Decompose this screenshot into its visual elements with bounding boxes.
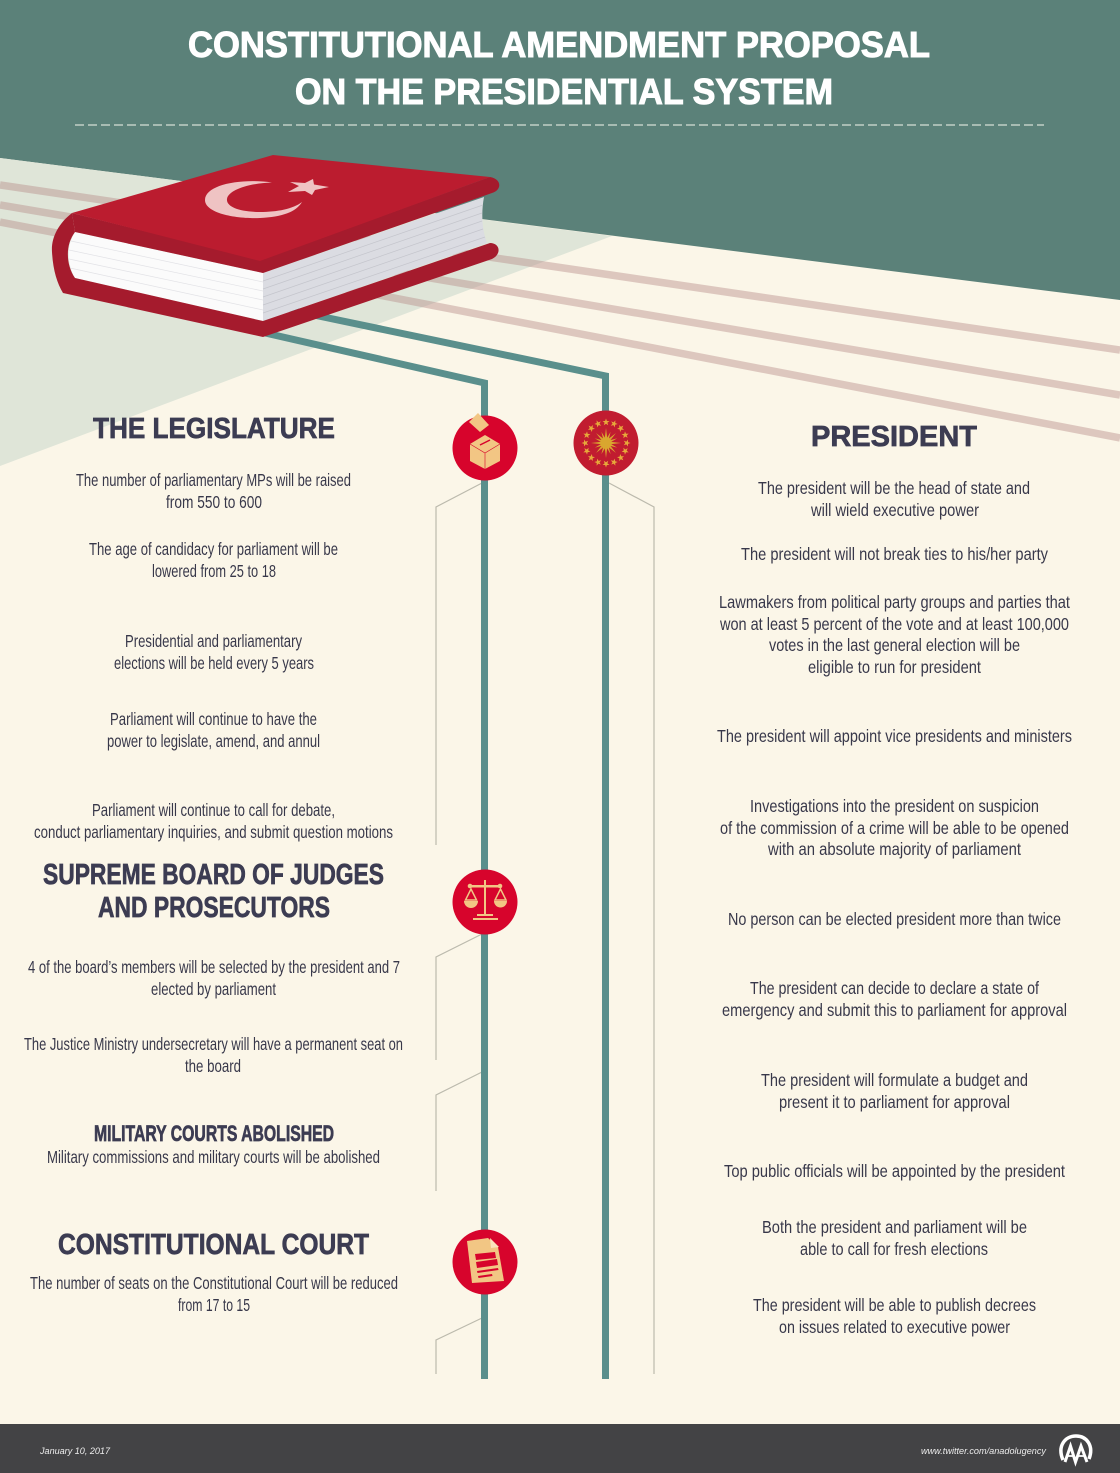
heading: the legislature: THE LEGISLATURE (93, 413, 335, 445)
text block: legislature point 1 (76, 470, 351, 512)
text block: legislature point 5 (34, 800, 393, 842)
text block: constitutional court: from 17 to 15 (178, 1295, 250, 1315)
title: ON THE PRESIDENTIAL SYSTEM (295, 71, 833, 112)
text block: president point 9: Top public officials will be appointed by the president (724, 1161, 1065, 1181)
teal header background (0, 0, 1120, 300)
star (288, 179, 329, 195)
icon: AA logo (1061, 1436, 1091, 1462)
text block: legislature point 5: conduct parliamentary inquiries, and submit question motions (34, 822, 393, 842)
text block: president point 8: The president will formulate a budget and (761, 1070, 1028, 1090)
heading: constitutional court: CONSTITUTIONAL COURT (58, 1229, 369, 1261)
crescent (205, 181, 302, 218)
icon: presidential emblem (574, 410, 638, 476)
text block: president point 10: able to call for fresh elections (800, 1239, 988, 1259)
heading: military courts abolished: MILITARY COURTS ABOLISHED (94, 1121, 334, 1146)
text block: president point 3: votes in the last general election will be (769, 635, 1020, 655)
text block: legislature point 1: from 550 to 600 (166, 492, 262, 512)
text block: president point 11: The president will be able to publish decrees (753, 1295, 1036, 1315)
title: CONSTITUTIONAL AMENDMENT PROPOSAL (188, 24, 930, 65)
top cover edge (72, 177, 499, 273)
title (188, 24, 930, 112)
text block: president point 7: The president can decide to declare a state of (750, 978, 1039, 998)
heading: supreme board of judges and prosecutors: SUPREME BOARD OF JUDGES (43, 859, 384, 891)
thin connector lines (436, 483, 654, 1374)
text block: president point 11: on issues related to executive power (779, 1317, 1010, 1337)
top cover (72, 155, 490, 261)
text block: board point 2: The Justice Ministry undersecretary will have a permanent seat on (24, 1034, 403, 1054)
teal timeline lines (230, 310, 606, 1379)
icon: document (452, 1230, 518, 1294)
page block side (263, 197, 487, 321)
text block: constitutional court (30, 1273, 398, 1315)
heading: supreme board of judges and prosecutors (43, 859, 384, 924)
text block: legislature point 3: elections will be held every 5 years (114, 653, 314, 673)
text block: board point 1 (28, 957, 400, 999)
footer url: www.twitter.com/anadolugency (921, 1446, 1047, 1457)
text block: president point 5 (720, 796, 1069, 859)
text block: legislature point 2: lowered from 25 to 18 (152, 561, 276, 581)
icon: scales of justice (452, 870, 518, 934)
text block: military courts: Military commissions and military courts will be abolished (47, 1147, 380, 1167)
text block: board point 1: elected by parliament (151, 979, 276, 999)
text block: president point 8 (761, 1070, 1028, 1112)
text block: president point 10: Both the president and parliament will be (762, 1217, 1027, 1237)
text block: board point 2: the board (185, 1056, 241, 1076)
text block: constitutional court: The number of seats on the Constitutional Court will be reduced (30, 1273, 398, 1293)
text block: president point 1: The president will be the head of state and (758, 478, 1030, 498)
text block: president point 8: present it to parliament for approval (779, 1092, 1010, 1112)
text block: president point 2: The president will not break ties to his/her party (741, 544, 1048, 564)
text block: legislature point 3: Presidential and parliamentary (125, 631, 302, 651)
text block: legislature point 2: The age of candidacy for parliament will be (89, 539, 338, 559)
footer bar (0, 1424, 1120, 1473)
book spine and lower cover (52, 213, 499, 337)
text block: president point 7 (722, 978, 1067, 1020)
text block: president point 3: eligible to run for president (808, 657, 981, 677)
text block: legislature point 4 (107, 709, 320, 751)
emblem stars (582, 418, 630, 468)
heading: president: PRESIDENT (811, 421, 977, 453)
text block: board point 2 (24, 1034, 403, 1076)
icon: ballot box (452, 413, 518, 480)
text block: legislature point 1: The number of parliamentary MPs will be raised (76, 470, 351, 490)
book shadow (0, 158, 612, 466)
text block: board point 1: 4 of the board’s members will be selected by the president and 7 (28, 957, 400, 977)
background stripes (0, 185, 1120, 438)
text block: legislature point 3 (114, 631, 314, 673)
icon: red book with Turkish flag emblem (52, 155, 499, 337)
footer date: January 10, 2017 (39, 1446, 111, 1457)
text block: legislature point 2 (89, 539, 338, 581)
emblem sunburst (591, 428, 621, 458)
text block: president point 3 (719, 592, 1070, 677)
page block front (69, 232, 263, 321)
text block: president point 10 (762, 1217, 1027, 1259)
text block: president point 5: with an absolute majority of parliament (767, 839, 1021, 859)
text block: president point 1 (758, 478, 1030, 520)
text block: legislature point 5: Parliament will continue to call for debate, (92, 800, 335, 820)
text block: president point 5: Investigations into the president on suspicion (750, 796, 1039, 816)
text block: legislature point 4: power to legislate, amend, and annul (107, 731, 320, 751)
text block: legislature point 4: Parliament will continue to have the (110, 709, 317, 729)
heading: supreme board of judges and prosecutors: AND PROSECUTORS (98, 892, 330, 924)
text block: president point 11 (753, 1295, 1036, 1337)
text block: president point 1: will wield executive power (810, 500, 979, 520)
